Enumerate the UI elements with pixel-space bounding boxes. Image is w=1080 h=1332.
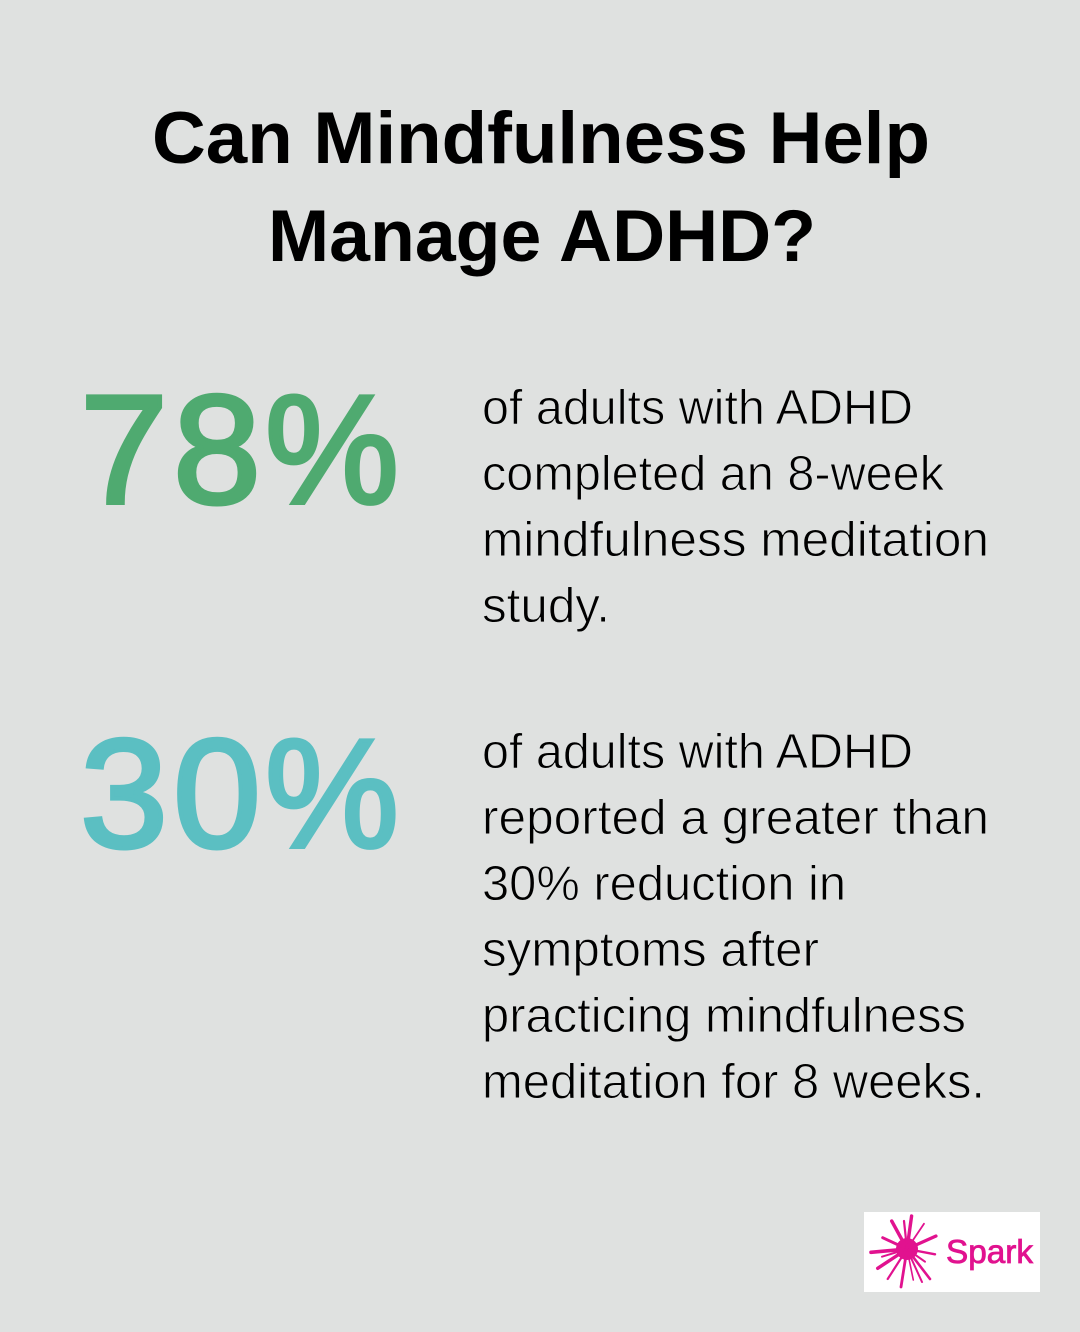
- title: Can Mindfulness Help: [152, 98, 930, 179]
- text block: 78% description: completed an 8-week: [482, 447, 944, 501]
- text block: 30% description: of adults with ADHD: [482, 725, 913, 779]
- text block: 78% description: study.: [482, 579, 610, 633]
- statistic: 78%: %: [265, 363, 399, 536]
- statistic: 30%: 3: [80, 707, 168, 880]
- text block: 78% description: of adults with ADHD: [482, 381, 913, 435]
- text block: 78% description: mindfulness meditation: [482, 513, 989, 567]
- text block: 30% description: reported a greater than: [482, 791, 989, 845]
- statistic: 30%: 0: [173, 707, 261, 880]
- icon: starburst: [871, 1216, 936, 1287]
- text block: 30% description: 30% reduction in: [482, 857, 846, 911]
- statistic: 30%: %: [265, 707, 399, 880]
- text block: 30% description: symptoms after: [482, 923, 819, 977]
- logo: Spark: [864, 1212, 1040, 1292]
- logo wordmark: Spark: [946, 1233, 1033, 1270]
- statistic: 30%: [80, 707, 399, 880]
- text block: 30% description: meditation for 8 weeks.: [482, 1055, 985, 1109]
- text block: 78% description: [482, 381, 989, 633]
- text block: 30% description: practicing mindfulness: [482, 989, 966, 1043]
- title: [152, 98, 930, 277]
- text block: 30% description: [482, 725, 989, 1109]
- statistic: 78%: 8: [173, 363, 261, 536]
- title: Manage ADHD?: [268, 196, 816, 277]
- statistic: 78%: 7: [80, 363, 168, 536]
- statistic: 78%: [80, 363, 399, 536]
